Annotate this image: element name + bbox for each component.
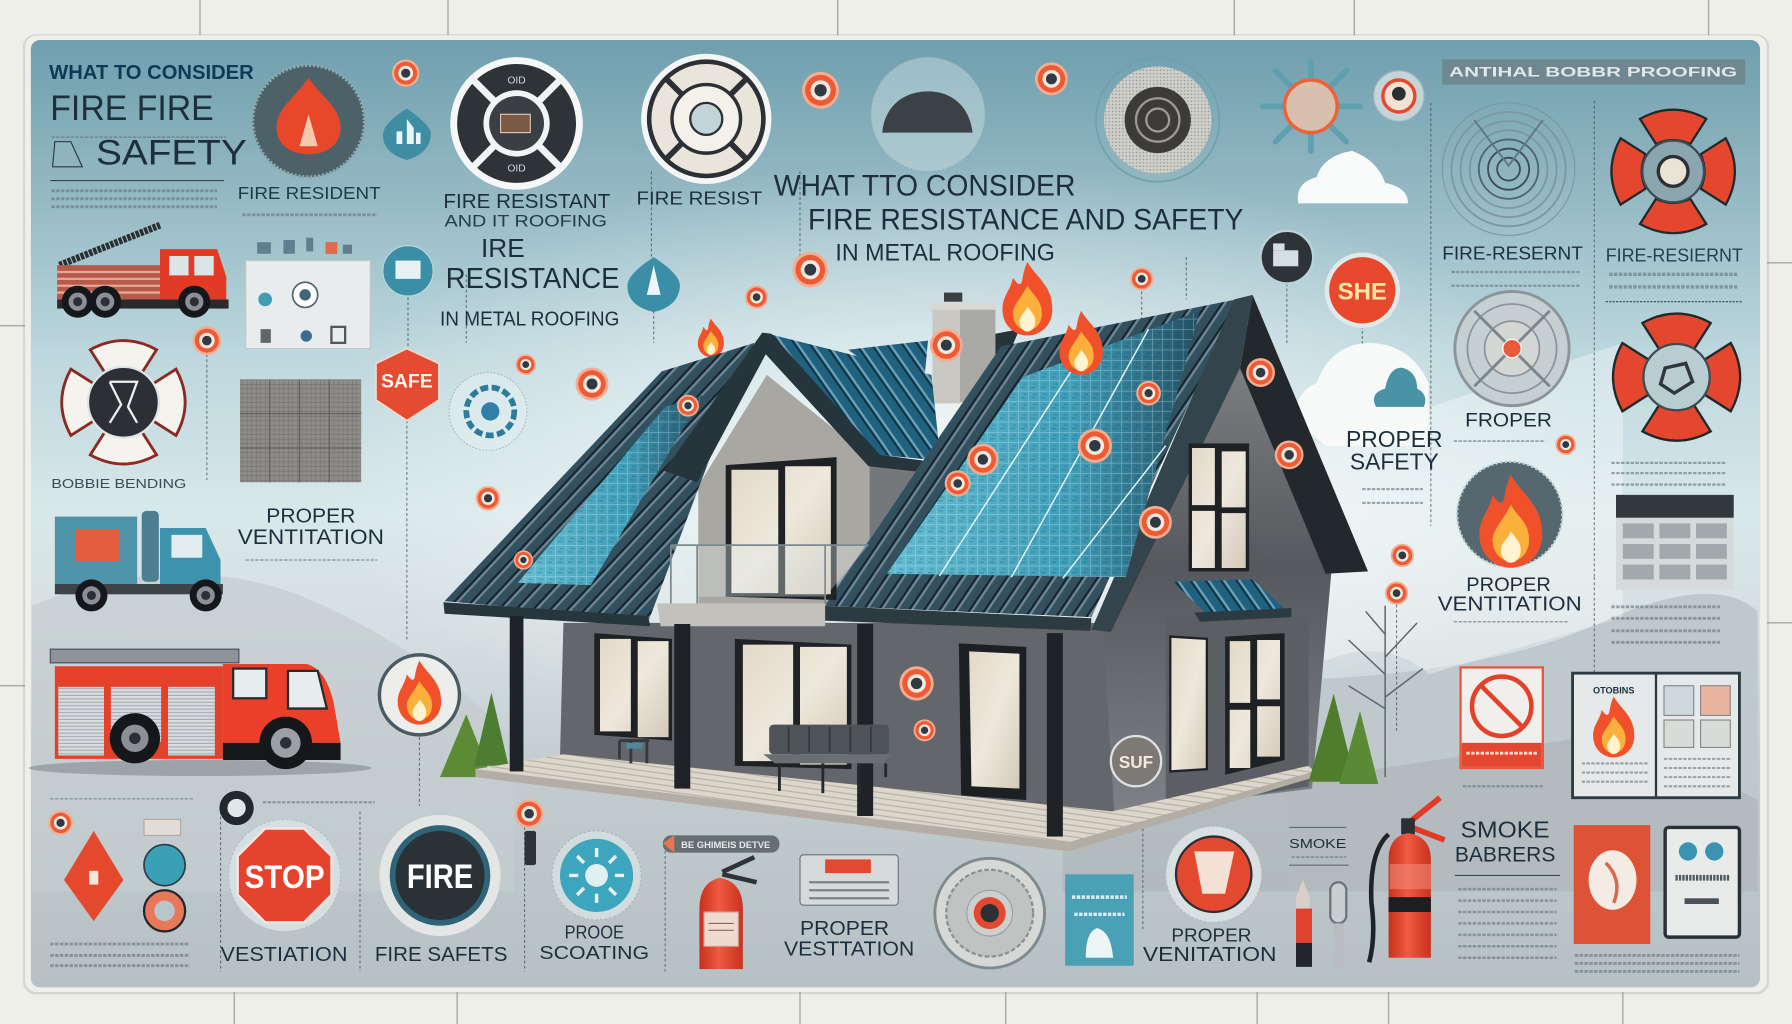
brochure: [1573, 673, 1739, 798]
pin large ring: [1374, 71, 1424, 121]
pin icon: [392, 59, 419, 87]
label: proper venitation: [1143, 925, 1277, 966]
left roof: [445, 343, 754, 619]
label: smoke barrers: SMOKE: [1461, 817, 1550, 843]
icon: red drop circle: [253, 65, 365, 177]
label: proper safety: [1346, 426, 1443, 503]
label: fire-resernt: [1442, 242, 1583, 286]
label: proper safety: PROPER: [1346, 426, 1443, 452]
main title: WHAT TTO CONSIDER: [774, 169, 1075, 202]
red card: [1574, 825, 1650, 944]
label: proper ventitation left: [238, 504, 384, 560]
dial badge dark: [450, 57, 583, 190]
stop sign: STOP: [245, 859, 325, 895]
label: proper ventitation left: PROPER: [266, 504, 355, 527]
pill label: BE GHIMEIS DETVE: [681, 840, 770, 850]
dial badge dark: OID: [507, 163, 526, 174]
label: fire-resiernt: FIRE-RESIERNT: [1606, 245, 1743, 266]
label: smoke barrers: BABRERS: [1455, 842, 1555, 867]
lower wall: [560, 623, 1114, 823]
teal sun circle: [552, 831, 641, 920]
label: fire resistant and roofing: [443, 190, 611, 230]
house: [443, 293, 1368, 851]
label: proper vestiation: VESTTATION: [784, 937, 914, 960]
label: proper ventitation: VENTITATION: [1438, 592, 1582, 615]
sign: suf: SUF: [1119, 752, 1153, 772]
dial badge light: [641, 54, 771, 184]
gray text block right: [1611, 607, 1720, 642]
wing windows: [1170, 633, 1285, 775]
label: froper: [1454, 409, 1552, 441]
left roof eave: [443, 602, 650, 626]
main roof solar panels: [887, 311, 1200, 577]
fire truck red 2: [29, 649, 371, 776]
label: smoke small: [1289, 827, 1349, 865]
label: fire-resernt: FIRE-RESERNT: [1442, 242, 1583, 263]
main title: FIRE RESISTANCE AND SAFETY: [808, 204, 1244, 237]
flame drop: [698, 319, 724, 357]
label: proper ventitation: PROPER: [1466, 574, 1551, 596]
columns: [510, 616, 1063, 837]
label: proper venitation: VENITATION: [1143, 944, 1277, 966]
back wall and upper gable wall: [698, 375, 872, 617]
gray text block bottom right: [1575, 955, 1739, 971]
tools: [1296, 880, 1346, 967]
shrub left: [440, 693, 509, 777]
lower left window: [594, 633, 672, 741]
deck: [475, 754, 1314, 851]
door: [959, 643, 1026, 800]
label: smoke barrers: [1455, 817, 1560, 958]
main title: [774, 169, 1244, 267]
device box: [800, 855, 898, 905]
icon: flame circle: [1457, 462, 1562, 568]
heading: what to consider fire safety: FIRE FIRE: [50, 88, 214, 128]
label: fire-resiernt: [1606, 245, 1743, 302]
large fire extinguisher: [1369, 798, 1445, 962]
sign: she circle: SHE: [1338, 278, 1387, 305]
teal circle icons: [383, 246, 680, 312]
bench: [763, 725, 891, 794]
label: bobbie bending: BOBBIE BENDING: [51, 476, 186, 491]
fire circle sign: [379, 815, 501, 936]
bare tree: [1349, 606, 1423, 777]
soffit: [1240, 295, 1368, 574]
caption under sign: [1463, 785, 1543, 787]
label: proode scoating: PROOE: [565, 921, 624, 942]
roof sliver between chimney and main roof: [995, 329, 1019, 386]
sign: safe: [376, 349, 439, 421]
icon: teal leaf: [383, 109, 431, 160]
chimney: [929, 293, 995, 403]
heading: what to consider fire safety: [49, 61, 254, 207]
upper center window: [726, 457, 837, 600]
lower center window: [735, 639, 851, 769]
cloud top: [1298, 151, 1408, 203]
right gabled wall: [1103, 366, 1331, 814]
center blue gable roof: [768, 334, 941, 461]
left roof panel: [518, 395, 703, 585]
fire department badge red: [1611, 110, 1735, 233]
label: proper ventitation left: VENTITATION: [238, 524, 384, 549]
icon: sun: [1263, 62, 1360, 151]
label: ire resistance in metal roofing: RESISTANCE: [446, 263, 619, 295]
shaded wall beside the center gable: [846, 457, 949, 611]
label: proper vestiation: [784, 917, 914, 960]
center gable fascia: [664, 333, 941, 482]
tablet: [1665, 827, 1739, 937]
red circle icon: [1166, 826, 1262, 922]
settings card: [246, 238, 370, 349]
icon: spiral vent: [1442, 103, 1575, 235]
gray text lines right: [1611, 463, 1726, 485]
dial badge dark: OID: [507, 75, 526, 86]
label: ire resistance in metal roofing: IN METAL ROOFING: [440, 308, 619, 331]
label: fire resident: FIRE RESIDENT: [238, 183, 381, 203]
dark ring icon: [219, 791, 375, 825]
no smoking sign: [1461, 667, 1543, 768]
main eave: [821, 606, 1091, 631]
icon: dark dome: [871, 57, 985, 171]
label: proode scoating: [539, 921, 649, 963]
label: proper venitation: PROPER: [1171, 925, 1251, 946]
gray dial: [935, 858, 1045, 968]
blue mandala: [449, 373, 527, 450]
keypad panel: [1616, 495, 1734, 590]
diamond icon group: [48, 799, 194, 966]
firefighter badge white: [62, 341, 185, 464]
sign: safe: SAFE: [381, 370, 433, 392]
brochure: OTOBINS: [1593, 686, 1634, 696]
upper right window: [1189, 443, 1249, 571]
label: fire resistant and roofing: AND IT ROOFING: [445, 211, 607, 230]
chair: [619, 741, 649, 763]
fire extinguisher small: [699, 857, 757, 969]
label: fire resist: FIRE RESIST: [637, 188, 762, 209]
icon: gray vent circle: [1455, 291, 1569, 406]
label: fire safets: FIRE SAFETS: [375, 944, 507, 966]
mesh panel: [240, 379, 361, 482]
dotted connector lines: [207, 101, 1594, 971]
label: proper ventitation: [1438, 574, 1582, 622]
heading: what to consider fire safety: WHAT TO CONSIDER: [49, 61, 254, 84]
teal poster: [1065, 874, 1134, 966]
main roof: [824, 299, 1237, 617]
cloud right with teal icon: [1297, 343, 1429, 446]
label: fire resistant and roofing: FIRE RESISTANT: [443, 190, 611, 213]
right banner: [1442, 59, 1745, 85]
sign: suf: [1111, 736, 1161, 786]
label: proper vestiation: PROPER: [800, 917, 889, 940]
gray caption lines: [242, 214, 377, 216]
heading: what to consider fire safety: SAFETY: [96, 133, 247, 173]
pins on house: [514, 329, 1304, 741]
label: ire resistance in metal roofing: IRE: [481, 233, 525, 263]
right bay wing: [1166, 617, 1309, 809]
back ridge roof: [848, 341, 928, 389]
label: proper safety: SAFETY: [1350, 449, 1439, 475]
flame on chimney: [1002, 262, 1052, 336]
main title: IN METAL ROOFING: [835, 240, 1055, 267]
main roof right fascia: [1091, 295, 1253, 632]
porch roof: [1173, 579, 1291, 622]
shrub right: [1309, 694, 1378, 784]
balcony: [657, 545, 869, 626]
pill label: [663, 835, 779, 853]
pins top: [192, 62, 1576, 605]
fire circle sign: FIRE: [407, 858, 473, 896]
icon: dark circle: [1261, 231, 1313, 283]
label: vestiation: VESTIATION: [221, 944, 347, 966]
flame on roof: [1059, 311, 1103, 375]
blue delivery truck: [55, 511, 223, 611]
fire department badge red 2: [1613, 314, 1740, 441]
label: proode scoating: SCOATING: [539, 942, 649, 963]
pin with tube: [515, 799, 544, 865]
stop sign: [229, 819, 341, 931]
fire truck red 1: [57, 225, 229, 318]
label: froper: FROPER: [1465, 409, 1552, 431]
label: smoke small: SMOKE: [1289, 836, 1347, 851]
icon: flame circle badge: [379, 655, 459, 735]
sign: she circle: [1325, 253, 1400, 328]
right banner: ANTIHAL BOBBR PROOFING: [1449, 65, 1737, 81]
icon: tree ring circle: [1096, 58, 1219, 182]
label: ire resistance in metal roofing: [440, 233, 619, 331]
